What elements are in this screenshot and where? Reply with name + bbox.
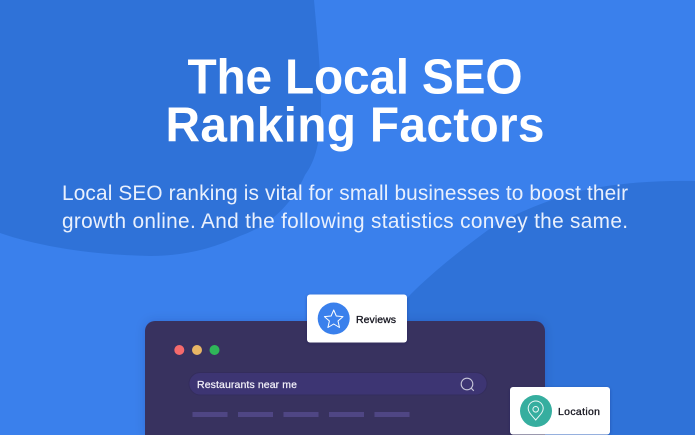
window panel	[145, 321, 545, 435]
icon: search	[461, 378, 474, 391]
card: location	[510, 387, 610, 434]
intro text	[62, 182, 628, 233]
label: reviews: Reviews	[356, 314, 396, 326]
title	[166, 50, 544, 153]
browser window	[145, 321, 545, 435]
intro text: Local SEO ranking is vital for small businesses to boost their	[62, 182, 628, 205]
background blob: bottom right	[340, 181, 695, 435]
background blob: top left	[0, 0, 321, 256]
icon: map pin	[520, 395, 552, 427]
result placeholders	[192, 412, 410, 417]
icon: star	[318, 302, 350, 334]
window controls	[174, 345, 220, 355]
search bar	[189, 372, 487, 395]
title: Ranking Factors	[166, 98, 545, 153]
search text: Restaurants near me	[197, 379, 297, 391]
card: reviews	[307, 294, 407, 342]
label: location: Location	[558, 406, 600, 418]
intro text: growth online. And the following statistics convey the same.	[62, 210, 628, 233]
title: The Local SEO	[187, 50, 523, 105]
